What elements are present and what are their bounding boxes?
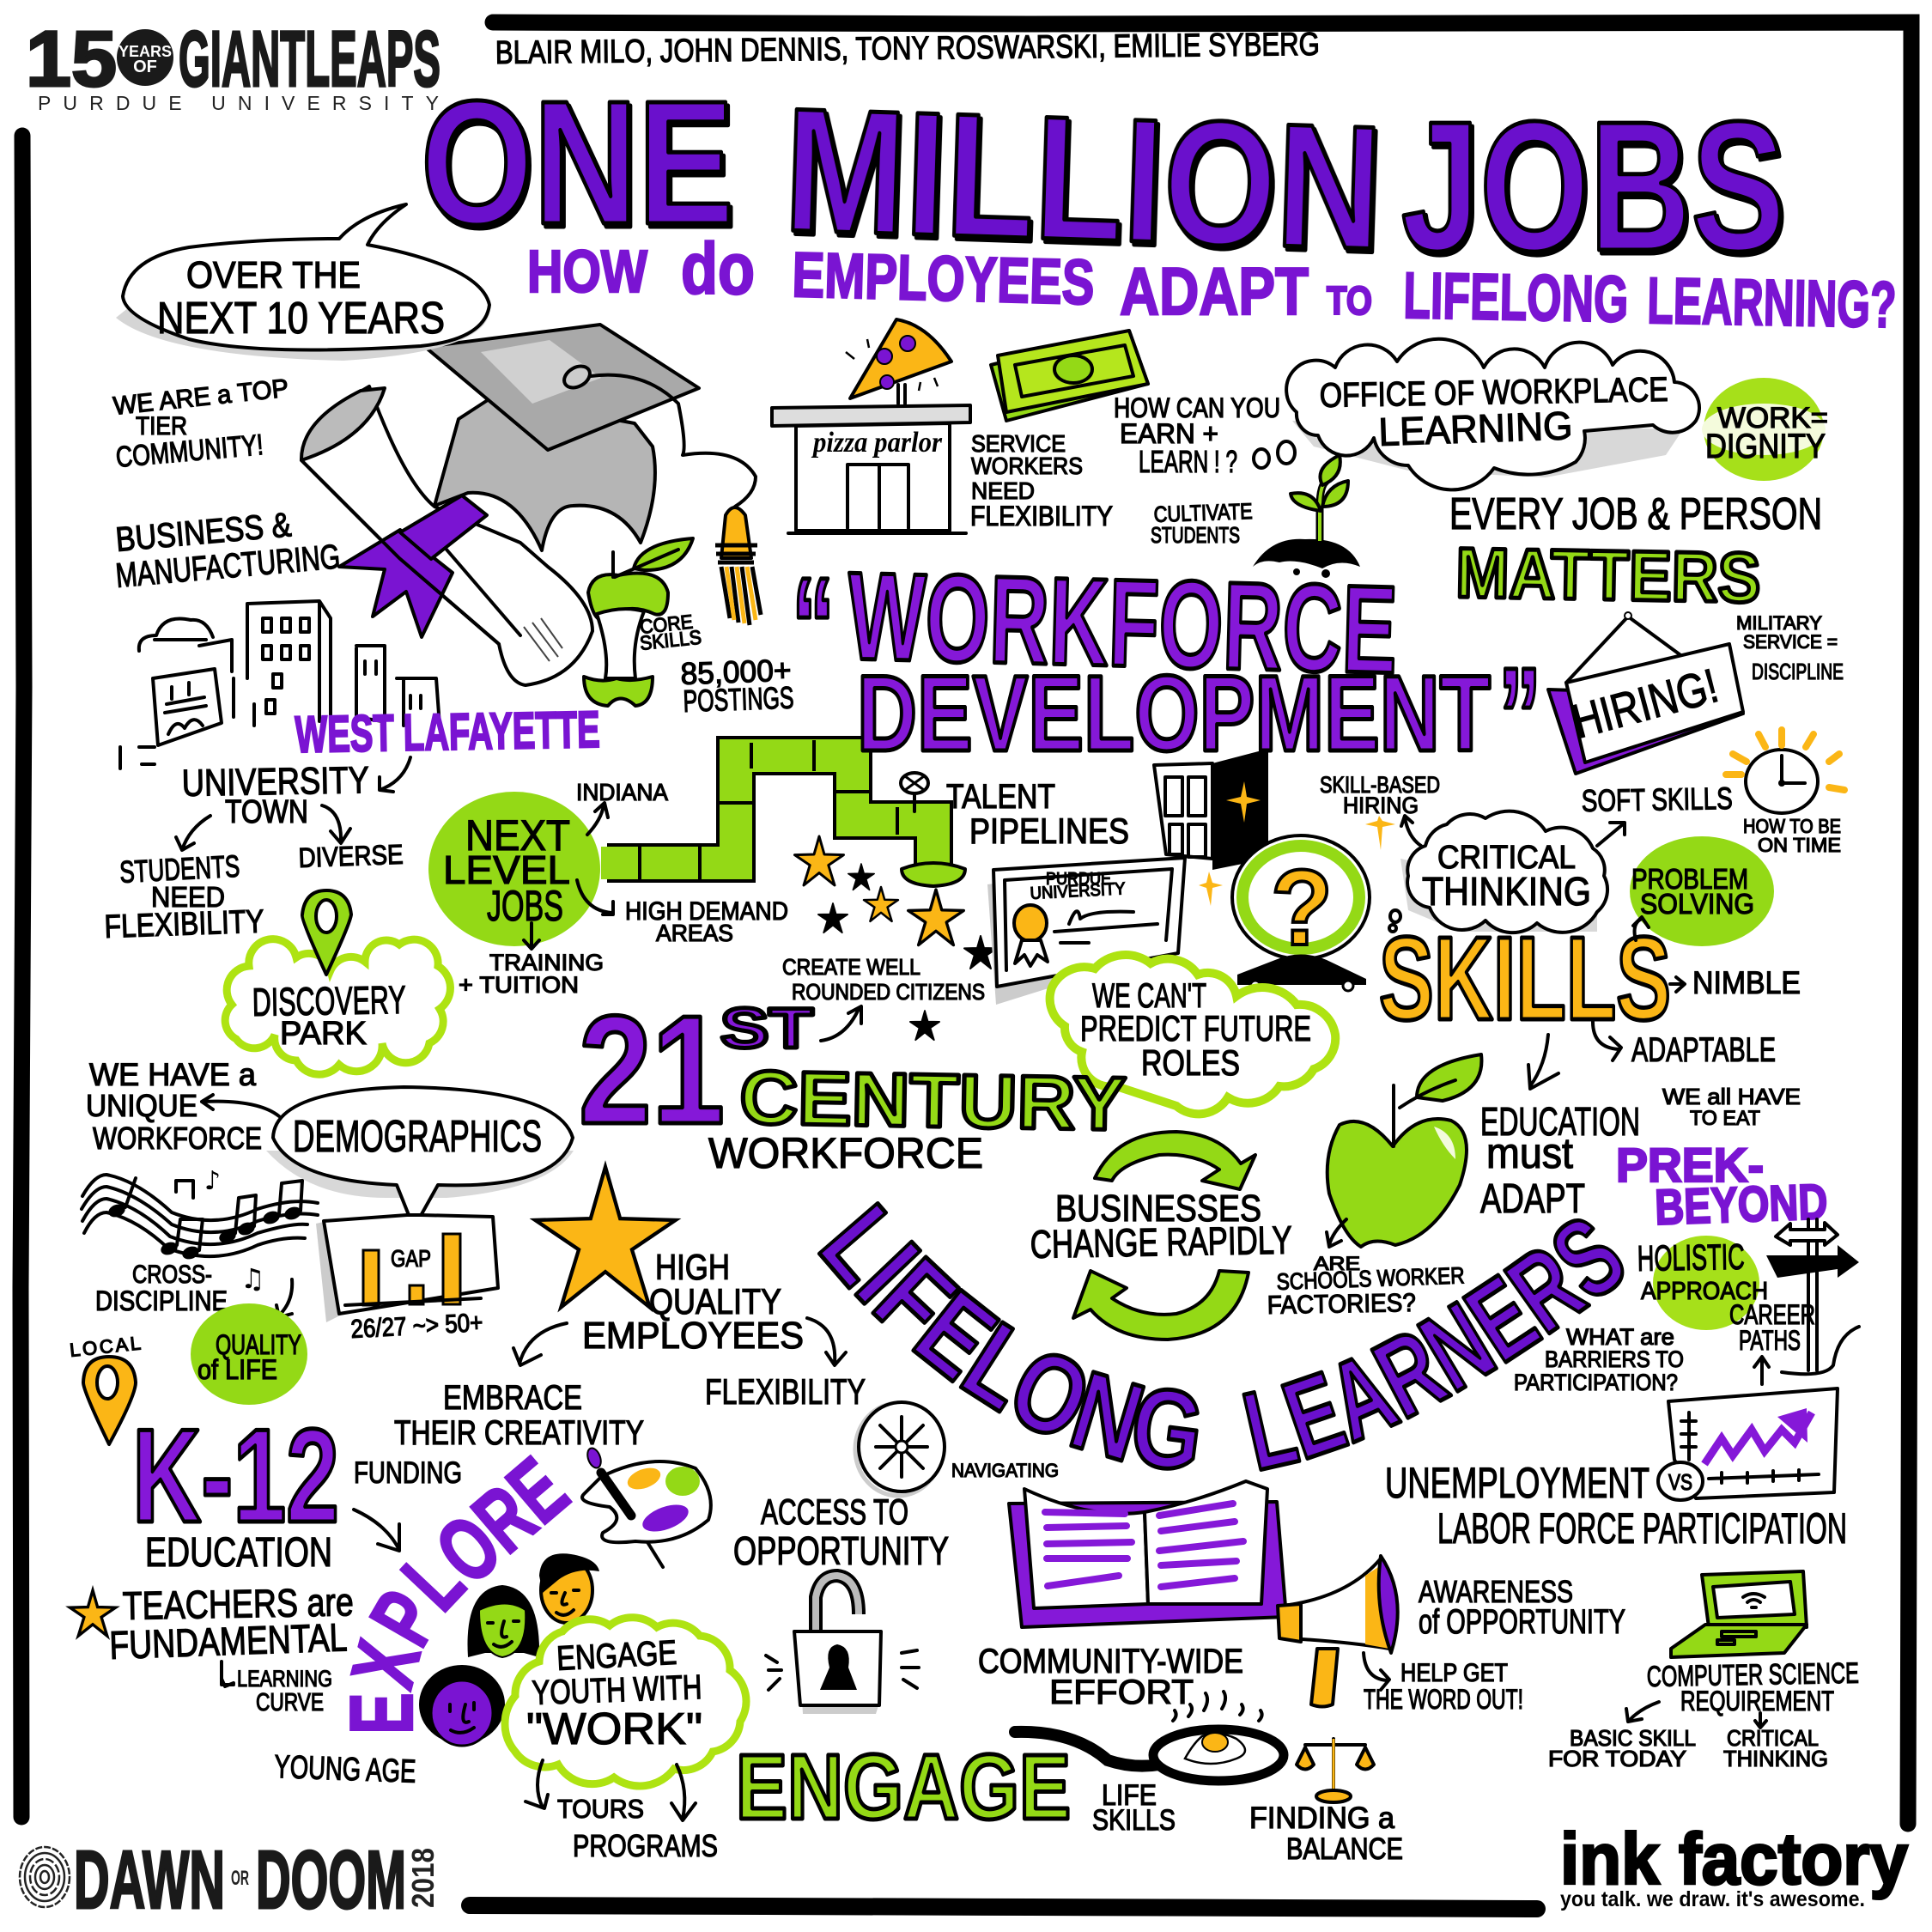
- face: green girl: [467, 1585, 539, 1657]
- text: cross-discipline: DISCIPLINE: [95, 1285, 228, 1316]
- text: indiana: INDIANA: [576, 779, 668, 805]
- heading: west lafayette: WEST LAFAYETTE: [295, 701, 600, 763]
- text: adaptable: ADAPTABLE: [1631, 1031, 1776, 1069]
- logo: 150 years of giant leaps: PURDUE UNIVERSITY: [38, 92, 439, 114]
- icon: open padlock: [766, 1576, 919, 1714]
- logo: dawn or doom 2018: DOOM: [256, 1834, 406, 1926]
- text: service workers need flexibility: [970, 430, 1113, 532]
- text: awareness of opportunity: of OPPORTUNITY: [1419, 1603, 1625, 1641]
- logo: 150 years of giant leaps: GIANTLEAPS: [179, 15, 440, 103]
- text: university town with arrows: UNIVERSITY: [181, 759, 369, 805]
- text: 85,000+ postings: 85,000+: [680, 653, 792, 691]
- text: learning curve: CURVE: [256, 1689, 324, 1716]
- scroll: [301, 386, 592, 685]
- ribbon: [339, 530, 453, 637]
- text: cultivate students: [1151, 498, 1253, 548]
- heading: prek - beyond: [1616, 1138, 1828, 1236]
- text: life skills: SKILLS: [1092, 1804, 1176, 1837]
- text: high demand areas: AREAS: [656, 920, 733, 946]
- icon: compass: [855, 1402, 945, 1496]
- subtitle question: ADAPT: [1120, 253, 1309, 329]
- text: young age: YOUNG AGE: [274, 1749, 416, 1790]
- text: students need flexibility: STUDENTS: [118, 848, 240, 890]
- icon: hiring sign: HIRING!: [1567, 658, 1723, 749]
- text: how to be on time: ON TIME: [1758, 834, 1841, 856]
- chart: gap bars: GAP: [391, 1245, 431, 1272]
- icon: purdue diploma certificate: [987, 858, 1185, 1005]
- text: embrace their creativity: [394, 1379, 644, 1452]
- text: are schools worker factories: SCHOOLS WORKER: [1276, 1262, 1465, 1295]
- icon: apple core: [584, 538, 693, 706]
- text: cross-discipline: [95, 1261, 292, 1317]
- text: embrace their creativity: THEIR CREATIVITY: [394, 1414, 644, 1452]
- text: core skills: SKILLS: [639, 626, 702, 654]
- tassel: [721, 507, 751, 558]
- text: finding a balance: BALANCE: [1286, 1832, 1403, 1866]
- text: critical thinking: [1723, 1725, 1828, 1771]
- text: help get the word out: HELP GET: [1400, 1659, 1508, 1687]
- tassel cord: [591, 375, 756, 507]
- authors: BLAIR MILO, JOHN DENNIS, TONY ROSWARSKI, EMILIE SYBERG: [495, 27, 1320, 71]
- title: MILLION: [782, 71, 1384, 287]
- text: training and tuition: TRAINING: [489, 950, 604, 975]
- icon: high quality star: [535, 1167, 676, 1307]
- icon: pizza slice: [846, 319, 951, 404]
- text: community-wide effort: [978, 1643, 1243, 1711]
- text: what are barriers to participation: [1514, 1324, 1684, 1395]
- heading: matters: MATTERS: [1455, 534, 1761, 617]
- heading: 21st century workforce: 21: [579, 984, 725, 1157]
- text: how can you earn and learn: LEARN ! ?: [1139, 444, 1237, 479]
- text: what are barriers to participation: PARTICIPATION?: [1514, 1370, 1678, 1395]
- icon: local map pin: [69, 1332, 142, 1444]
- chart: gap bars: [316, 1215, 498, 1322]
- text: high demand areas: [577, 880, 788, 946]
- icon: hiring sign: [1548, 612, 1743, 774]
- text: students need flexibility: FLEXIBILITY: [104, 904, 264, 945]
- cloud: critical thinking: [1389, 811, 1607, 933]
- green circle: next level jobs: LEVEL: [443, 848, 570, 892]
- text: are schools worker factories: [1267, 1219, 1465, 1320]
- text: skill-based hiring: [1320, 772, 1440, 818]
- cloud: critical thinking: THINKING: [1422, 869, 1591, 914]
- speech bubble: over the next 10 years: [116, 204, 489, 361]
- text: tours and programs: TOURS: [557, 1794, 644, 1824]
- icon group: stars: [795, 836, 997, 1040]
- icon: megaphone: [1278, 1556, 1398, 1707]
- text: we have a unique workforce: [86, 1057, 279, 1156]
- green circle: quality of life: [191, 1303, 307, 1405]
- icon: fingerprint: [20, 1847, 70, 1907]
- text: how can you earn and learn: [1114, 392, 1295, 479]
- cloud: discovery park: DISCOVERY: [252, 977, 406, 1024]
- text: business and manufacturing: [114, 506, 342, 595]
- logo: 150 years of giant leaps: 15: [26, 15, 117, 103]
- text: top tier community: COMMUNITY!: [114, 428, 264, 474]
- speech bubble: over the next 10 years: NEXT 10 YEARS: [157, 294, 445, 343]
- heading: engage: ENGAGE: [736, 1735, 1071, 1838]
- text: service workers need flexibility: FLEXIBILITY: [970, 501, 1113, 532]
- text: community-wide effort: EFFORT: [1049, 1674, 1194, 1711]
- heading: lifelong learners arc: LEARNERS: [1242, 1218, 1625, 1472]
- text: university town with arrows: [176, 757, 410, 850]
- icon: crystal ball with question mark: ?: [1271, 848, 1333, 968]
- text: high demand areas: HIGH DEMAND: [625, 897, 788, 926]
- text: learning curve: [222, 1662, 332, 1716]
- text: soft skills: [1401, 781, 1733, 846]
- heading: k-12 education: EDUCATION: [145, 1530, 332, 1576]
- text: we all have to eat: WE all HAVE: [1662, 1084, 1801, 1109]
- heading: prek - beyond: BEYOND: [1654, 1174, 1828, 1236]
- cloud: engage youth with work: "WORK": [526, 1704, 702, 1754]
- text: are schools worker factories: ARE: [1314, 1253, 1360, 1274]
- text: what are barriers to participation: BARRIERS TO: [1545, 1346, 1684, 1372]
- text: training and tuition: + TUITION: [459, 972, 579, 998]
- text: military service = discipline: SERVICE =: [1743, 631, 1838, 653]
- green circle: problem solving: PROBLEM: [1631, 863, 1748, 895]
- logo: ink factory: you talk. we draw. it's awesome.: [1560, 1887, 1865, 1911]
- text: we all have to eat: [1662, 1084, 1801, 1130]
- text: education must adapt: [1480, 1099, 1640, 1222]
- logo: 150 years of giant leaps: YEARS: [118, 43, 172, 60]
- icon: clock with rays: [1726, 730, 1844, 813]
- text: education must adapt: ADAPT: [1480, 1176, 1585, 1222]
- face: yellow boy: [539, 1553, 599, 1623]
- gown hood: [434, 397, 655, 550]
- text: access to opportunity: [733, 1492, 949, 1573]
- subtitle question: HOW: [527, 238, 647, 305]
- icon: music staff and notes: [82, 1166, 318, 1261]
- text: what are barriers to participation: WHAT are: [1566, 1324, 1674, 1350]
- text: computer science requirement: REQUIREMENT: [1680, 1686, 1834, 1716]
- subtitle question: [527, 228, 1897, 342]
- heading: 21st century workforce: WORKFORCE: [708, 1129, 983, 1177]
- text: career paths: PATHS: [1739, 1325, 1801, 1356]
- cloud: engage youth with work: ENGAGE: [556, 1634, 677, 1678]
- text: teachers are fundamental: [70, 1579, 354, 1668]
- logo: dawn or doom 2018: [20, 1834, 440, 1926]
- text: education must adapt: must: [1486, 1129, 1573, 1177]
- cloud: we can't predict future roles: [1050, 955, 1335, 1114]
- icon: purdue diploma certificate: PURDUE: [1046, 870, 1111, 889]
- text: we have a unique workforce: UNIQUE: [86, 1088, 197, 1123]
- green circle: quality of life: of LIFE: [197, 1354, 277, 1385]
- heading: explore along curve: EXPLORE: [349, 1455, 574, 1731]
- green circle: work = dignity: WORK=: [1717, 402, 1828, 434]
- text: life skills: [1092, 1779, 1176, 1837]
- text: finding a balance: [1249, 1801, 1403, 1866]
- text: talent pipelines: [946, 778, 1129, 851]
- heading: 21st century workforce: [579, 984, 1127, 1177]
- text: how to be on time: HOW TO BE: [1743, 815, 1841, 837]
- heading: skills: SKILLS: [1379, 913, 1671, 1045]
- cloud: office of workplace learning: LEARNING: [1378, 403, 1573, 454]
- icon: business cycle arrows: [1073, 1132, 1255, 1340]
- logo: 150 years of giant leaps: OF: [133, 58, 157, 76]
- icon: purdue diploma certificate: UNIVERSITY: [1030, 879, 1126, 903]
- cloud: office of workplace learning: OFFICE OF WORKPLACE: [1319, 371, 1668, 415]
- text: high quality employees: EMPLOYEES: [582, 1315, 804, 1357]
- text: every job and person: EVERY JOB & PERSON: [1449, 489, 1822, 539]
- heading: prek - beyond: PREK-: [1616, 1138, 1764, 1192]
- cloud: engage youth with work: [505, 1618, 746, 1786]
- text: create well rounded citizens: ROUNDED CITIZENS: [792, 979, 985, 1005]
- text: 26/27 to 50+: 26/27 ~> 50+: [350, 1309, 483, 1344]
- text: high quality employees: [513, 1247, 846, 1365]
- text: awareness of opportunity: [1419, 1574, 1625, 1641]
- text: military service = discipline: MILITARY: [1736, 612, 1822, 634]
- text: service workers need flexibility: WORKERS: [971, 453, 1083, 479]
- text: funding with arrow: FUNDING: [354, 1456, 462, 1490]
- subtitle question: EMPLOYEES: [792, 239, 1096, 318]
- heading: lifelong learners arc: LIFELONG: [817, 1201, 1200, 1471]
- text: business and manufacturing: BUSINESS &: [114, 506, 293, 559]
- text: cross-discipline: CROSS-: [132, 1261, 212, 1289]
- cloud: we can't predict future roles: WE CAN'T: [1092, 977, 1206, 1015]
- face: purple curly hair: [419, 1665, 505, 1746]
- text: military service = discipline: DISCIPLINE: [1752, 659, 1844, 684]
- text: help get the word out: [1364, 1653, 1523, 1715]
- text: cultivate students: CULTIVATE: [1153, 498, 1253, 527]
- text: core skills: [639, 611, 702, 654]
- heading: lifelong learners arc: [817, 1201, 1625, 1472]
- text: how to be on time: [1743, 815, 1841, 856]
- logo: dawn or doom 2018: 2018: [405, 1848, 440, 1908]
- title: ONE: [421, 64, 734, 261]
- text: create well rounded citizens: [782, 954, 985, 1041]
- logo: ink factory: ink factory: [1560, 1819, 1908, 1899]
- text: top tier community: WE ARE a TOP: [112, 374, 290, 421]
- text: students need flexibility: [104, 848, 264, 945]
- text: awareness of opportunity: AWARENESS: [1419, 1574, 1573, 1609]
- text: navigating: NAVIGATING: [951, 1460, 1059, 1481]
- text: top tier community: [112, 374, 290, 474]
- icon: green map pin: [302, 890, 351, 975]
- illustration: scroll and graduation cap: [301, 325, 761, 685]
- green circle: next level jobs: [428, 792, 600, 946]
- icon: open door: [1154, 749, 1268, 870]
- logo: 150 years of giant leaps: [26, 15, 440, 114]
- text: access to opportunity: OPPORTUNITY: [733, 1528, 949, 1573]
- text: help get the word out: THE WORD OUT!: [1364, 1684, 1523, 1715]
- green circle: holistic approach: [1637, 1236, 1768, 1330]
- icon: city skyline: [120, 601, 440, 769]
- text: high quality employees: HIGH: [655, 1247, 730, 1287]
- text: teachers are fundamental: FUNDAMENTAL: [109, 1614, 348, 1668]
- chart: line going up: [1658, 1388, 1838, 1500]
- text: 85,000+ postings: [680, 653, 794, 719]
- text: high quality employees: QUALITY: [649, 1281, 781, 1321]
- text: critical thinking: CRITICAL: [1727, 1725, 1819, 1751]
- icon: balance scale: [1297, 1739, 1374, 1802]
- text: basic skill for today: [1548, 1725, 1696, 1771]
- faces: three young people: [419, 1553, 599, 1746]
- green circle: work = dignity: [1702, 378, 1828, 481]
- heading: 21st century workforce: ST: [720, 996, 813, 1060]
- icon: money bill: [991, 331, 1148, 421]
- heading: workforce development: ”: [1498, 639, 1541, 793]
- text: training and tuition: [459, 923, 604, 998]
- text: businesses change rapidly: CHANGE RAPIDLY: [1030, 1218, 1292, 1267]
- text: businesses change rapidly: BUSINESSES: [1055, 1188, 1261, 1230]
- text: basic skill for today: FOR TODAY: [1548, 1746, 1686, 1771]
- green circle: problem solving: [1630, 836, 1774, 946]
- text: 85,000+ postings: POSTINGS: [683, 680, 794, 719]
- scroll opening: [301, 388, 385, 460]
- icon: green apple: [1327, 1054, 1481, 1247]
- text: adaptable: [1593, 1022, 1776, 1069]
- speech bubble: demographics: DEMOGRAPHICS: [293, 1112, 542, 1162]
- text: we have a unique workforce: WE HAVE a: [89, 1057, 256, 1092]
- text: business and manufacturing: MANUFACTURING: [114, 538, 342, 595]
- title: [421, 64, 1785, 289]
- text: funding with arrow: [354, 1456, 462, 1551]
- text: nimble: NIMBLE: [1692, 965, 1801, 1000]
- text: community-wide effort: COMMUNITY-WIDE: [978, 1643, 1243, 1680]
- text: learning curve: LEARNING: [237, 1666, 332, 1692]
- text: skill-based hiring: SKILL-BASED: [1320, 772, 1440, 798]
- green circle: quality of life: QUALITY: [216, 1329, 301, 1360]
- icon: open book: [1009, 1481, 1286, 1627]
- text: life skills: LIFE: [1102, 1779, 1157, 1812]
- text: career paths: [1729, 1299, 1815, 1384]
- logo: dawn or doom 2018: DAWN: [74, 1834, 225, 1926]
- icon: signpost: [1766, 1219, 1859, 1374]
- green circle: holistic approach: HOLISTIC: [1637, 1236, 1745, 1279]
- cloud: office of workplace learning: [1286, 339, 1699, 489]
- icon: crystal ball with question mark: [1232, 835, 1370, 991]
- icon: sprout in soil: [1253, 455, 1360, 578]
- green circle: next level jobs: JOBS: [487, 882, 563, 930]
- title: JOBS: [1401, 82, 1785, 289]
- text: career paths: CAREER: [1729, 1299, 1815, 1330]
- text: tours and programs: PROGRAMS: [573, 1828, 718, 1863]
- text: skill-based hiring: HIRING: [1343, 793, 1419, 818]
- cap board: [425, 325, 699, 450]
- text: embrace their creativity: EMBRACE: [443, 1379, 582, 1417]
- text: unemployment vs labor force participation: UNEMPLOYMENT: [1385, 1459, 1649, 1507]
- cloud: we can't predict future roles: ROLES: [1141, 1042, 1240, 1083]
- icon: music staff and notes: ♪: [204, 1166, 221, 1196]
- speech bubble: demographics: [266, 1087, 574, 1228]
- icon: paint palette and brush: [582, 1446, 711, 1567]
- text: cross-discipline: ♫: [240, 1262, 265, 1295]
- cloud: critical thinking: CRITICAL: [1437, 840, 1576, 876]
- text: businesses change rapidly: [1030, 1188, 1292, 1267]
- text: top tier community: TIER: [136, 412, 187, 440]
- green circle: holistic approach: APPROACH: [1641, 1278, 1768, 1305]
- text: cultivate students: STUDENTS: [1151, 522, 1240, 548]
- subtitle question: TO: [1327, 278, 1372, 323]
- text: talent pipelines: TALENT: [946, 778, 1055, 816]
- text: service workers need flexibility: NEED: [971, 477, 1035, 504]
- text: diverse: DIVERSE: [298, 839, 404, 873]
- text: create well rounded citizens: CREATE WELL: [782, 954, 920, 980]
- cloud: discovery park: [225, 939, 450, 1074]
- icon: local map pin: LOCAL: [69, 1332, 142, 1361]
- text: tours and programs: [526, 1760, 718, 1863]
- text: access to opportunity: ACCESS TO: [761, 1492, 908, 1532]
- illustration: talent pipeline: [601, 740, 965, 886]
- text: flexibility: FLEXIBILITY: [705, 1371, 866, 1412]
- text: education must adapt: EDUCATION: [1480, 1099, 1640, 1144]
- text: soft skills: SOFT SKILLS: [1581, 781, 1733, 818]
- text: basic skill for today: BASIC SKILL: [1570, 1725, 1696, 1751]
- text: we all have to eat: TO EAT: [1690, 1107, 1760, 1130]
- heading: workforce development: [792, 546, 1541, 793]
- parlor sign text: pizza parlor: [811, 427, 943, 459]
- heading: workforce development: “: [792, 549, 835, 702]
- text: service workers need flexibility: SERVICE: [971, 430, 1066, 457]
- text: students need flexibility: NEED: [151, 881, 225, 913]
- text: are schools worker factories: FACTORIES?: [1267, 1289, 1416, 1320]
- heading: k-12 education: [132, 1401, 339, 1576]
- text: how can you earn and learn: HOW CAN YOU: [1114, 392, 1280, 423]
- icon: laptop: [1671, 1571, 1807, 1657]
- subtitle question: do: [681, 228, 755, 309]
- text: core skills: CORE: [639, 611, 694, 638]
- heading: k-12 education: K-12: [132, 1401, 339, 1550]
- heading: 21st century workforce: CENTURY: [739, 1054, 1127, 1146]
- text: how can you earn and learn: EARN +: [1120, 418, 1218, 449]
- text: computer science requirement: [1626, 1657, 1859, 1728]
- cloud: we can't predict future roles: PREDICT FUTURE: [1080, 1008, 1311, 1048]
- text: university town with arrows: TOWN: [225, 794, 308, 830]
- text: military service = discipline: [1736, 612, 1844, 684]
- text: critical thinking: THINKING: [1723, 1746, 1828, 1771]
- text: teachers are fundamental: TEACHERS are: [122, 1579, 354, 1628]
- text: finding a balance: FINDING a: [1249, 1801, 1395, 1835]
- text: unemployment vs labor force participation: [1385, 1459, 1847, 1552]
- subtitle question: LIFELONG: [1403, 259, 1629, 337]
- heading: workforce development: WORKFORCE: [846, 546, 1399, 700]
- heading: skills: [1379, 913, 1671, 1045]
- green circle: problem solving: SOLVING: [1640, 888, 1754, 920]
- icon: frying pan with egg: [1015, 1692, 1284, 1781]
- icon: yellow sparkles: [1199, 816, 1395, 906]
- text: we have a unique workforce: WORKFORCE: [93, 1121, 262, 1156]
- cloud: discovery park: PARK: [280, 1016, 367, 1052]
- logo: dawn or doom 2018: OR: [231, 1867, 249, 1890]
- text: talent pipelines: PIPELINES: [969, 811, 1129, 851]
- cloud: engage youth with work: YOUTH WITH: [532, 1668, 702, 1712]
- illustration: pizza parlor building: [772, 405, 970, 533]
- speech bubble: over the next 10 years: OVER THE: [186, 254, 361, 296]
- text: indiana: [576, 779, 668, 835]
- heading: workforce development: DEVELOPMENT: [857, 654, 1491, 774]
- green circle: next level jobs: NEXT: [465, 811, 570, 860]
- green circle: work = dignity: DIGNITY: [1705, 428, 1826, 465]
- chart: line going up: VS: [1668, 1469, 1692, 1495]
- arrow: skills to education: [1528, 1035, 1558, 1089]
